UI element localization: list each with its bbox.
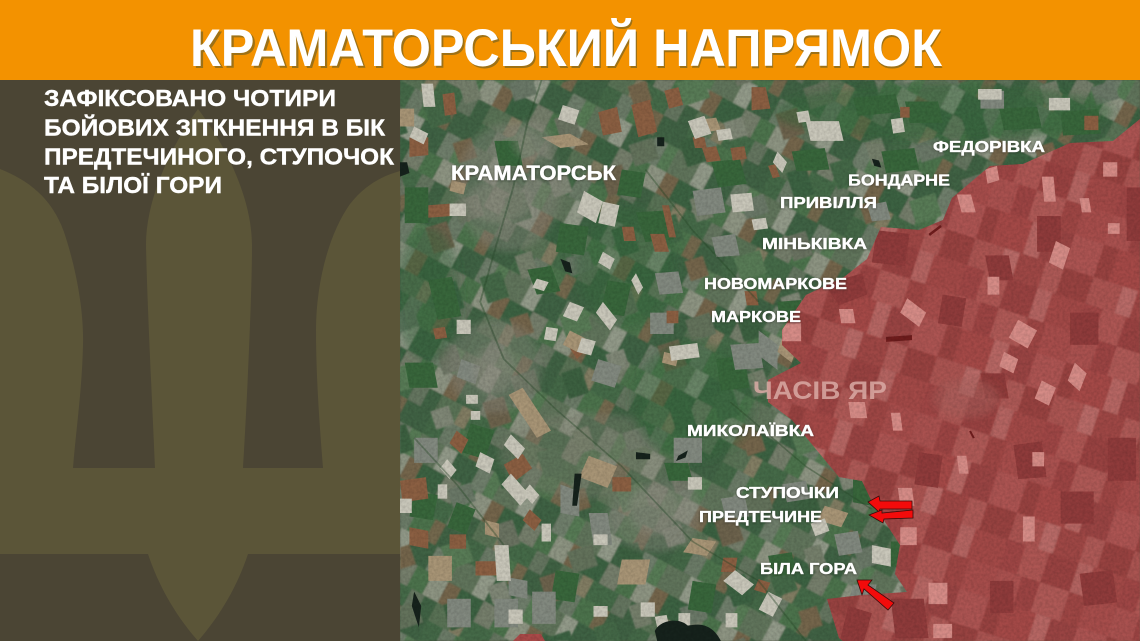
arrow: towards Stupochky	[868, 496, 912, 512]
left panel	[0, 80, 400, 641]
Chasiv Yar town	[936, 381, 1000, 418]
label: Chasiv Yar: ЧАСІВ ЯР	[753, 377, 887, 405]
label: Fedorivka: ФЕДОРІВКА	[933, 139, 1046, 156]
occupied area	[760, 110, 1140, 641]
label: Pryvillia: ПРИВІЛЛЯ	[780, 195, 877, 212]
label: Predtechyne: ПРЕДТЕЧИНЕ	[699, 509, 822, 526]
brown fields	[400, 87, 1098, 593]
label: Stupochky: СТУПОЧКИ	[736, 485, 839, 502]
panel: satellite map	[395, 80, 1140, 641]
label: Bila Hora: БІЛА ГОРА	[760, 561, 858, 578]
small red ravines	[886, 225, 975, 439]
arrow: towards Predtechyne	[869, 510, 913, 523]
label: Markove: МАРКОВЕ	[711, 309, 801, 326]
light fields	[400, 84, 1070, 627]
dark ponds	[400, 137, 881, 641]
arrow: towards Bila Hora	[857, 580, 894, 610]
text block: summary: БОЙОВИХ ЗІТКНЕННЯ В БІК	[44, 114, 386, 140]
regional tone	[395, 84, 1113, 552]
text block: summary: ТА БІЛОЇ ГОРИ	[44, 172, 222, 198]
text block: summary: ЗАФІКСОВАНО ЧОТИРИ	[44, 85, 336, 111]
label: Bondarne: БОНДАРНЕ	[848, 172, 950, 190]
dark green fields	[405, 94, 1101, 613]
map terrain fields	[395, 80, 1113, 641]
tree lines and river	[414, 80, 872, 641]
title: КРАМАТОРСЬКИЙ НАПРЯМОК	[190, 17, 943, 78]
pink fields	[782, 162, 1120, 638]
label: Minkivka: МІНЬКІВКА	[762, 236, 868, 253]
city labels	[451, 139, 1046, 578]
title: КРАМАТОРСЬКИЙ НАПРЯМОК	[192, 19, 943, 80]
darker red fields	[825, 187, 1140, 641]
Kramatorsk and town grey areas	[466, 121, 681, 534]
text block: summary: ПРЕДТЕЧИНОГО, СТУПОЧОК	[44, 144, 395, 170]
tan fields	[400, 109, 848, 584]
label: Kramatorsk: КРАМАТОРСЬК	[451, 162, 616, 185]
header band	[0, 0, 1140, 80]
text block: summary	[44, 85, 395, 198]
label: Mykolaivka: МИКОЛАЇВКА	[687, 422, 815, 440]
grain overlay	[400, 80, 1140, 641]
grey-blue fields	[414, 91, 1004, 627]
small red patch at bottom	[513, 634, 545, 641]
label: Novomarkove: НОВОМАРКОВЕ	[704, 276, 847, 293]
icon: trident emblem	[0, 109, 400, 641]
